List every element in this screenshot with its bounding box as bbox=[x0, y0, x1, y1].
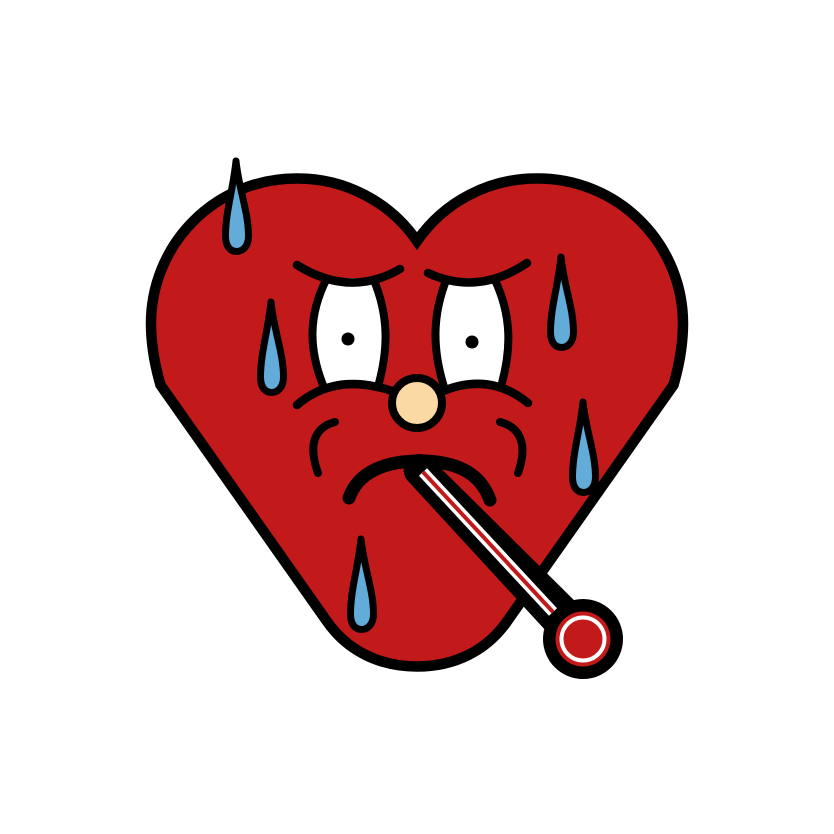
mouth bbox=[349, 461, 490, 500]
left lower lid bbox=[297, 384, 392, 405]
sweat drop 4 bbox=[572, 402, 596, 492]
right eye bbox=[435, 278, 508, 390]
sweat drop 3 bbox=[550, 257, 574, 348]
sweat drop 1 bbox=[226, 161, 248, 252]
thermometer bulb bbox=[543, 599, 623, 679]
right eyebrow bbox=[428, 263, 527, 282]
right cheek bbox=[500, 422, 522, 473]
thermometer bbox=[404, 454, 623, 679]
sweat drop 2 bbox=[260, 302, 284, 392]
left eye bbox=[312, 278, 386, 390]
right lower lid bbox=[443, 384, 528, 403]
heart body bbox=[151, 178, 683, 666]
left cheek bbox=[313, 422, 335, 473]
left eyebrow bbox=[297, 265, 400, 283]
nose bbox=[392, 378, 442, 428]
sweat drop 5 bbox=[350, 539, 374, 630]
thermometer stem bbox=[404, 454, 591, 645]
thermometer stripe bbox=[423, 472, 553, 612]
